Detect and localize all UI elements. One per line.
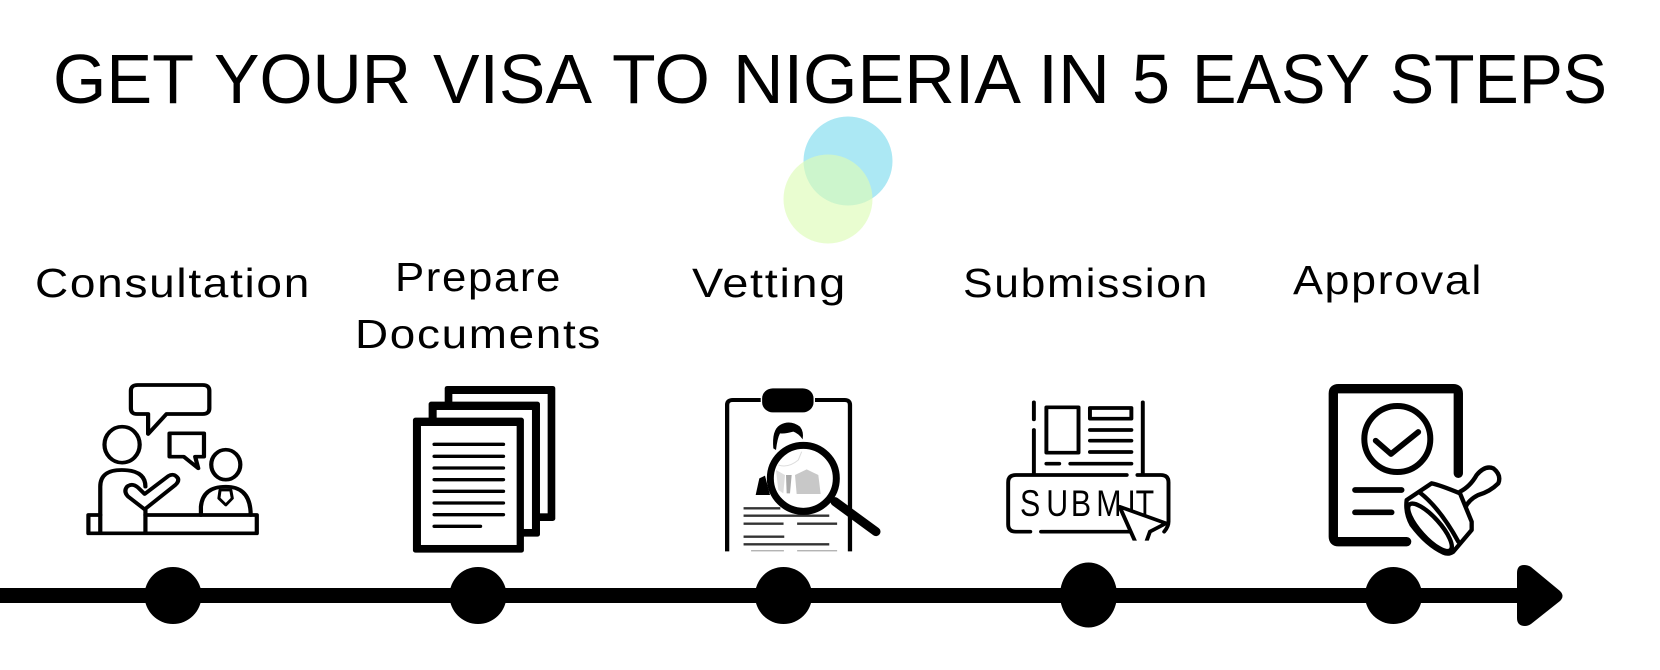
step marker 2 — [450, 567, 506, 624]
step label: Prepare Documents: Prepare — [395, 254, 562, 300]
title: STEPS — [1390, 40, 1607, 118]
step marker 1 — [144, 567, 202, 624]
title: 5 — [1132, 40, 1170, 118]
title: NIGERIA — [733, 40, 1021, 118]
title — [53, 40, 1607, 118]
icon: submit form: SUBMIT — [1020, 483, 1154, 525]
title: YOUR — [214, 40, 411, 118]
title: VISA — [433, 40, 592, 118]
title: IN — [1038, 40, 1110, 118]
step marker 4 — [1060, 562, 1117, 628]
title: TO — [612, 40, 710, 118]
icon: stacked documents — [413, 386, 555, 553]
step label: Consultation: Consultation — [35, 260, 311, 306]
step marker 3 — [755, 567, 812, 624]
decorative overlapping circles — [784, 116, 892, 244]
step label: Approval: Approval — [1293, 257, 1483, 303]
step label: Prepare Documents — [355, 254, 602, 357]
step label: Submission: Submission — [963, 260, 1209, 306]
title: GET — [53, 40, 194, 118]
icon: consultation — [88, 385, 257, 533]
step label: Prepare Documents: Documents — [355, 311, 602, 357]
icon: approval stamp — [1333, 389, 1499, 557]
title: EASY — [1192, 40, 1370, 118]
icon: submit form — [1008, 402, 1169, 547]
step label: Vetting: Vetting — [692, 260, 847, 306]
step marker 5 — [1365, 567, 1422, 624]
icon: vetting clipboard with magnifier — [727, 388, 876, 553]
timeline arrow — [0, 565, 1562, 626]
